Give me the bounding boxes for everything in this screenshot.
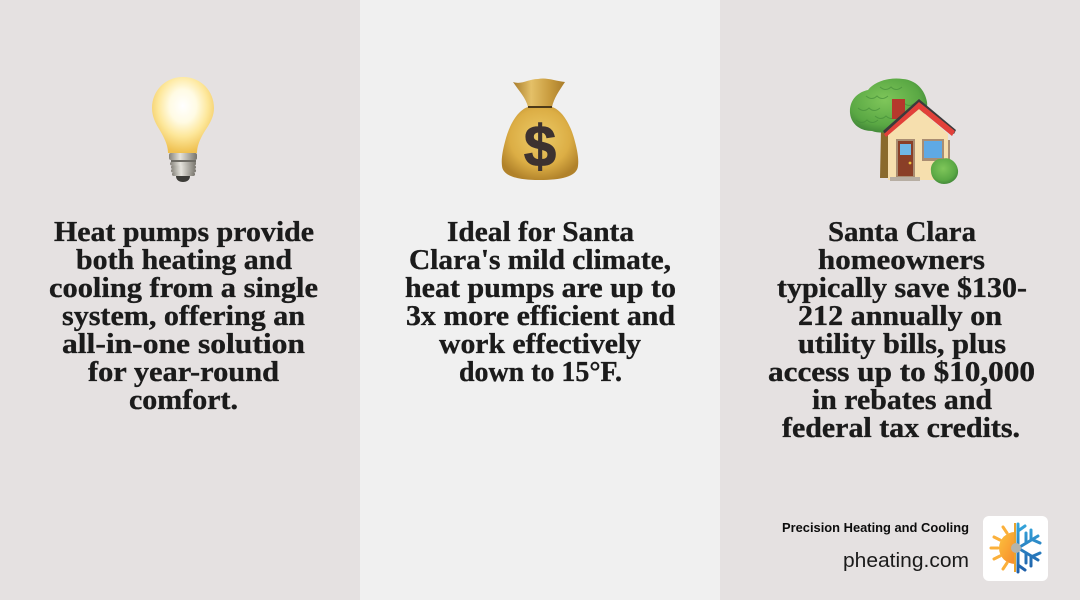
heading: ideal for mild climate: Clara's mild climate, bbox=[409, 245, 671, 276]
icon: money bag bbox=[502, 78, 578, 180]
heading: ideal for mild climate: down to 15°F. bbox=[459, 357, 622, 388]
panel: all-in-one system bbox=[0, 0, 360, 600]
heading: heat pumps provide heating and cooling bbox=[49, 217, 318, 416]
icon: light bulb bbox=[152, 77, 214, 182]
heading: ideal for mild climate bbox=[405, 217, 676, 388]
website: pheating.com bbox=[843, 550, 969, 572]
logo: sun and snowflake bbox=[983, 516, 1048, 581]
heading: ideal for mild climate: heat pumps are up to bbox=[405, 273, 676, 304]
heading: savings and rebates bbox=[768, 217, 1035, 444]
heading: heat pumps provide heating and cooling: all-in-one solution bbox=[62, 329, 305, 360]
heading: savings and rebates: federal tax credits. bbox=[782, 413, 1020, 444]
panel: savings and rebates bbox=[720, 0, 1080, 600]
heading: savings and rebates: access up to $10,000 bbox=[768, 357, 1035, 388]
panel background left bbox=[0, 0, 360, 600]
heading: savings and rebates: Santa Clara bbox=[828, 217, 976, 248]
panel background middle bbox=[360, 0, 720, 600]
heading: savings and rebates: 212 annually on bbox=[798, 301, 1002, 332]
heading: savings and rebates: utility bills, plus bbox=[798, 329, 1006, 360]
heading: heat pumps provide heating and cooling: for year-round bbox=[88, 357, 279, 388]
heading: heat pumps provide heating and cooling: system, offering an bbox=[62, 301, 305, 332]
heading: heat pumps provide heating and cooling: both heating and bbox=[76, 245, 292, 276]
panel background right bbox=[720, 0, 1080, 600]
icon: house with tree bbox=[850, 78, 958, 184]
heading: heat pumps provide heating and cooling: Heat pumps provide bbox=[54, 217, 314, 248]
heading: savings and rebates: homeowners bbox=[818, 245, 985, 276]
heading: savings and rebates: in rebates and bbox=[812, 385, 992, 416]
heading: heat pumps provide heating and cooling: comfort. bbox=[129, 385, 238, 416]
panel: efficiency in mild climate bbox=[360, 0, 720, 600]
heading: ideal for mild climate: 3x more efficient and bbox=[406, 301, 675, 332]
heading: ideal for mild climate: Ideal for Santa bbox=[447, 217, 634, 248]
heading: savings and rebates: typically save $130- bbox=[777, 273, 1027, 304]
brand name: Precision Heating and Cooling bbox=[782, 521, 969, 535]
icon: money bag: $ bbox=[524, 114, 556, 179]
heading: ideal for mild climate: work effectively bbox=[439, 329, 641, 360]
heading: heat pumps provide heating and cooling: cooling from a single bbox=[49, 273, 318, 304]
